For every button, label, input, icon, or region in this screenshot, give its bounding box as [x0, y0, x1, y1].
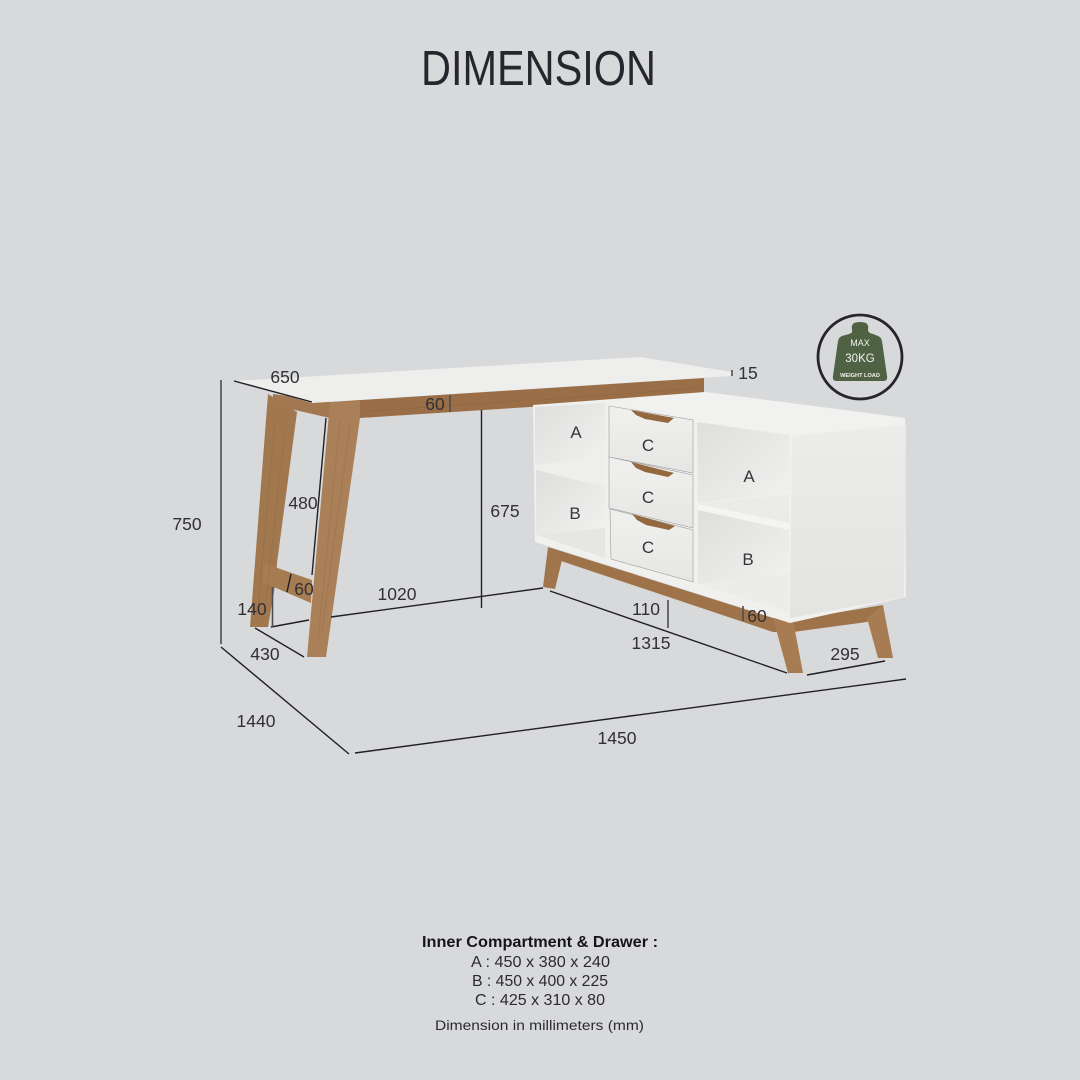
left base shelf: [536, 528, 605, 558]
stretcher 60: 60: [294, 579, 314, 599]
15 tick: [731, 370, 733, 376]
cabinet leg left: [543, 547, 562, 589]
left shelf: [536, 458, 605, 487]
icon: max weight load badge: [818, 315, 902, 399]
desk stretcher rail: [262, 563, 312, 603]
750: 750: [172, 514, 202, 534]
1020 line left: [271, 620, 309, 627]
A right: A: [743, 467, 755, 486]
1315: 1315: [632, 633, 670, 653]
desk back leg: [250, 394, 297, 627]
430 line: [255, 628, 304, 657]
C drawer 1: C: [642, 436, 654, 455]
compartment B: B : 450 x 400 x 225: [472, 973, 608, 990]
140: 140: [237, 599, 267, 619]
295: 295: [830, 644, 860, 664]
1450: 1450: [598, 728, 637, 748]
650: 650: [270, 367, 300, 387]
650 line: [234, 381, 312, 402]
750 line: [220, 380, 222, 644]
295 line: [807, 661, 885, 675]
15: 15: [738, 363, 758, 383]
inner compartment text block: [422, 934, 658, 1033]
cabinet leg front: [773, 618, 803, 673]
desk top: [234, 357, 732, 403]
cabinet body: [533, 392, 906, 623]
weight shape: [833, 322, 887, 381]
wood grain: [258, 388, 700, 640]
cabinet leg right: [867, 605, 893, 658]
1440: 1440: [237, 711, 276, 731]
110: 110: [632, 599, 660, 619]
drawer 2 handle: [631, 462, 674, 477]
desk front leg: [307, 401, 360, 657]
675 line: [480, 410, 482, 608]
1020 line right: [331, 588, 543, 617]
rail 60 line: [742, 606, 744, 621]
desk side apron: [273, 394, 332, 418]
140 line: [272, 587, 274, 627]
right upper compartment: [697, 422, 789, 503]
cabinet rail: [548, 547, 883, 632]
B left: B: [569, 504, 581, 523]
right lower compartment: [698, 510, 789, 584]
compartment A: A : 450 x 380 x 240: [471, 954, 610, 971]
compartment C: C : 425 x 310 x 80: [475, 992, 605, 1009]
A left: A: [570, 423, 582, 442]
1450 line: [355, 679, 906, 753]
drawer 3 handle: [632, 514, 675, 530]
480 line: [312, 418, 326, 575]
675: 675: [490, 501, 520, 521]
right shelf: [698, 494, 789, 523]
left upper compartment: [535, 403, 605, 465]
1020: 1020: [378, 584, 417, 604]
left lower compartment: [536, 470, 605, 535]
cabinet side panel: [790, 425, 906, 618]
furniture: L-shaped desk with cabinet: [234, 357, 906, 673]
units note: Dimension in millimeters (mm): [435, 1018, 644, 1033]
B right: B: [742, 550, 754, 569]
drawer 2: [609, 457, 693, 528]
measure lines: [221, 370, 906, 754]
weight load label: WEIGHT LOAD: [840, 373, 880, 379]
drawer 1: [609, 406, 693, 473]
dimension labels: [172, 363, 860, 748]
right base shelf: [698, 573, 789, 612]
drawer 3: [610, 509, 693, 582]
max label: MAX: [850, 338, 870, 348]
stretcher 60 line: [287, 574, 291, 592]
heading: Inner Compartment & Drawer :: [422, 934, 658, 951]
480: 480: [288, 493, 318, 513]
right shelf front edge: [698, 504, 789, 530]
title: DIMENSION: [421, 42, 656, 96]
C drawer 2: C: [642, 488, 654, 507]
top rail 60: 60: [425, 394, 445, 414]
430: 430: [250, 644, 280, 664]
rail 60: 60: [747, 606, 767, 626]
C drawer 3: C: [642, 538, 654, 557]
drawer 1 handle: [631, 410, 674, 423]
110 line: [667, 600, 669, 628]
cabinet top: [607, 392, 905, 436]
desk front apron: [330, 378, 704, 419]
1315 line: [550, 591, 787, 673]
30kg label: 30KG: [845, 353, 875, 365]
top 60 line: [449, 395, 451, 412]
compartment letters: [569, 423, 755, 569]
1440 line: [221, 647, 349, 754]
